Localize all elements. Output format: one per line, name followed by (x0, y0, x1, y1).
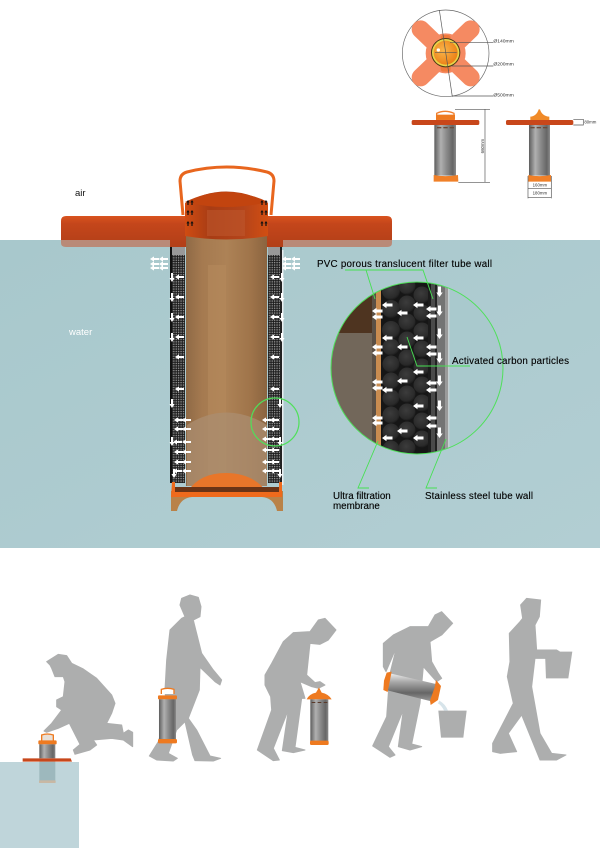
callout labels (317, 259, 569, 512)
callout labels: Activated carbon particles (452, 356, 569, 367)
filter being tipped (383, 672, 441, 705)
dimension labels top view (493, 38, 514, 98)
filter carried (158, 688, 177, 743)
pouring water (438, 701, 448, 711)
top view (402, 10, 493, 97)
person 1 kneeling (23, 654, 133, 783)
person 3 bending (257, 618, 336, 761)
label: water: water (68, 327, 92, 338)
callout labels: Stainless steel tube wall (425, 491, 533, 502)
side view B: 80mm (584, 120, 597, 125)
side view B (506, 109, 597, 198)
filter beside person (307, 687, 332, 745)
callout leader lines (345, 270, 470, 488)
dimension labels top view: Ø500mm (493, 92, 514, 98)
technical drawing: top view and side views (402, 10, 597, 198)
water background (0, 240, 600, 548)
callout labels: PVC porous translucent filter tube wall (317, 259, 492, 270)
side view B: 160mm (533, 183, 547, 188)
water flow arrows: inside walls (169, 273, 285, 478)
PVC tube wall and steel wall (428, 282, 450, 454)
callout labels: Ultra filtration (333, 491, 391, 502)
water flow arrows: inlet (150, 256, 300, 271)
person 5 carrying bucket (493, 598, 572, 760)
person 4 pouring (373, 612, 467, 757)
mesh filter walls (170, 247, 284, 485)
flow arrows in detail (372, 286, 443, 441)
side view B: 180mm (533, 190, 547, 195)
small callout circle (251, 398, 299, 446)
dimension labels top view: Ø200mm (493, 62, 514, 68)
filter in pond (23, 734, 72, 783)
side view A (412, 109, 490, 182)
side view A: 660mm (480, 138, 485, 153)
carbon particles (382, 282, 428, 453)
base (171, 482, 283, 511)
callout labels: membrane (333, 501, 380, 512)
bucket (438, 711, 467, 738)
label: air: air (75, 188, 86, 199)
pond (0, 762, 79, 848)
dimension labels top view: Ø140mm (493, 38, 514, 44)
filter cross-section (61, 167, 392, 511)
air vent arrows (186, 200, 268, 226)
carried bucket (545, 652, 572, 678)
handle (180, 167, 274, 215)
magnifier outline (331, 282, 503, 454)
inner tube (186, 236, 267, 491)
float wings (61, 216, 392, 247)
cap (185, 192, 268, 240)
person 2 walking (149, 595, 222, 761)
magnified detail (331, 278, 503, 458)
